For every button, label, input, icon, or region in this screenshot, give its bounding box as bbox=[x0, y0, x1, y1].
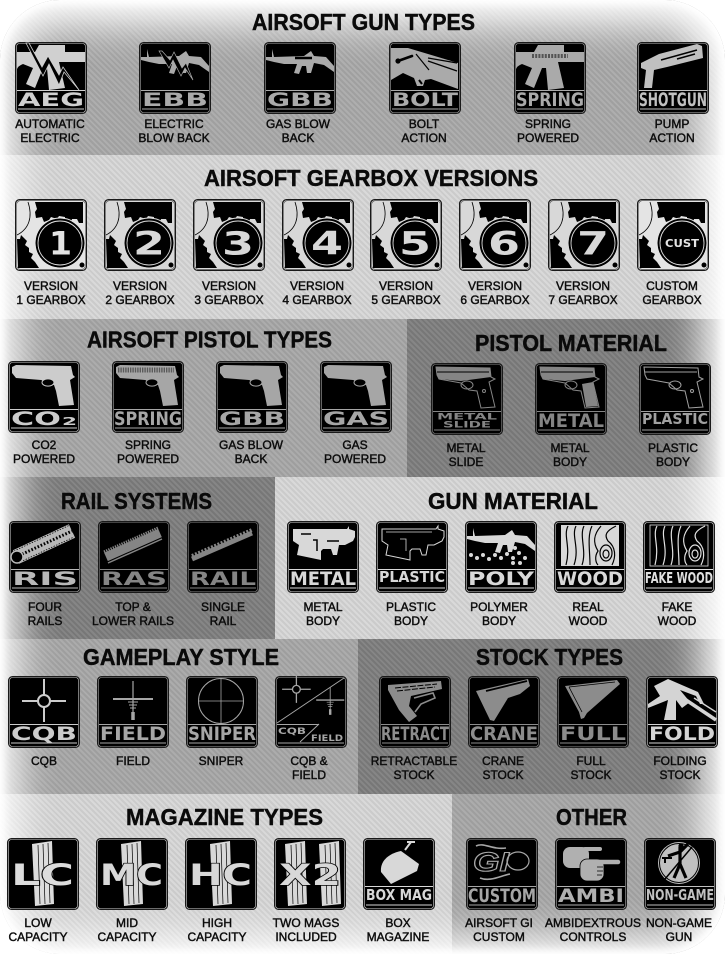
label: VERSION bbox=[468, 279, 522, 293]
label: LOW bbox=[24, 916, 52, 930]
icon: version 5: 5 bbox=[399, 224, 431, 262]
label: FIELD bbox=[292, 768, 326, 782]
icon: single rail bbox=[188, 522, 258, 592]
icon: metal body receiver: METAL bbox=[290, 568, 356, 590]
label: PUMP bbox=[655, 117, 689, 131]
label: CQB bbox=[31, 754, 57, 768]
icon: AEG bbox=[16, 42, 86, 114]
icon: spring: SPRING bbox=[516, 89, 584, 111]
panel: pistol material bbox=[407, 319, 725, 477]
label: GAS BLOW bbox=[266, 117, 331, 131]
panel: airsoft pistol types bbox=[0, 319, 407, 477]
icon: GBB pistol bbox=[216, 362, 288, 432]
label: ELECTRIC bbox=[20, 131, 80, 145]
icon: airsoft GI custom: GI bbox=[473, 847, 510, 877]
label: AUTOMATIC bbox=[15, 117, 85, 131]
label: SNIPER bbox=[199, 754, 244, 768]
label: TWO MAGS bbox=[273, 916, 339, 930]
icon: version 2 bbox=[104, 200, 176, 270]
panel: rail systems bbox=[0, 477, 275, 639]
label: VERSION bbox=[202, 279, 256, 293]
label: GEARBOX bbox=[642, 293, 702, 307]
label: MAGAZINE bbox=[367, 930, 429, 944]
label: GUN bbox=[666, 930, 692, 944]
icon: CO2 bbox=[8, 362, 80, 432]
icon: non-game gun bbox=[644, 838, 716, 910]
icon: spring pistol bbox=[112, 362, 184, 432]
icon: version 6: 6 bbox=[488, 224, 520, 262]
icon: fake wood bbox=[644, 522, 714, 592]
label: SPRING bbox=[525, 117, 571, 131]
label: CAPACITY bbox=[187, 930, 247, 944]
label: VERSION bbox=[290, 279, 344, 293]
icon: polymer bbox=[466, 522, 536, 592]
heading: OTHER bbox=[556, 804, 627, 830]
label: 3 GEARBOX bbox=[194, 293, 264, 307]
icon: RAS bbox=[98, 522, 170, 592]
label: TOP & bbox=[115, 600, 151, 614]
label: POWERED bbox=[13, 452, 75, 466]
panel: other bbox=[452, 794, 725, 954]
icon: sniper: SNIPER bbox=[188, 723, 256, 745]
icon: CO2: 2 bbox=[62, 415, 77, 428]
icon: version 6 bbox=[460, 200, 530, 270]
label: BODY bbox=[656, 455, 690, 469]
icon: two mags: X2 bbox=[279, 858, 341, 892]
icon: version 3: 3 bbox=[222, 224, 254, 262]
label: FIELD bbox=[116, 754, 150, 768]
heading: STOCK TYPES bbox=[476, 644, 623, 670]
icon: low capacity: LC bbox=[11, 858, 74, 892]
icon: plastic body bbox=[640, 364, 710, 434]
label: CUSTOM bbox=[473, 930, 525, 944]
icon: version 1 bbox=[16, 200, 86, 270]
label: VERSION bbox=[379, 279, 433, 293]
label: RETRACTABLE bbox=[371, 754, 457, 768]
label: RAIL bbox=[210, 614, 237, 628]
icon: high capacity bbox=[186, 838, 256, 910]
label: 6 GEARBOX bbox=[460, 293, 530, 307]
heading: GAMEPLAY STYLE bbox=[83, 644, 279, 670]
label: METAL bbox=[446, 441, 486, 455]
label: SINGLE bbox=[201, 600, 245, 614]
icon: GBB: GBB bbox=[267, 89, 333, 111]
icon: version 5 bbox=[370, 200, 442, 270]
label: WOOD bbox=[569, 614, 608, 628]
icon: plastic body receiver: PLASTIC bbox=[379, 568, 445, 586]
label: 5 GEARBOX bbox=[371, 293, 441, 307]
icon: single rail: RAIL bbox=[190, 568, 256, 590]
panel: stock types bbox=[358, 639, 725, 794]
label: BOLT bbox=[409, 117, 440, 131]
label: BODY bbox=[394, 614, 428, 628]
icon: real wood bbox=[554, 522, 626, 592]
icon: spring pistol: SPRING bbox=[114, 408, 182, 430]
icon: airsoft GI custom bbox=[466, 838, 538, 910]
label: BOX bbox=[385, 916, 411, 930]
icon: RIS: RIS bbox=[12, 568, 78, 590]
icon: crane stock bbox=[468, 676, 540, 748]
label: 1 GEARBOX bbox=[16, 293, 86, 307]
icon: full stock: FULL bbox=[560, 723, 626, 745]
icon: folding stock: FOLD bbox=[649, 723, 715, 745]
icon: polymer: POLY bbox=[468, 568, 534, 590]
icon: field bbox=[98, 676, 168, 748]
panel: gun material bbox=[275, 477, 725, 639]
label: CQB & bbox=[290, 754, 328, 768]
icon: crane stock: CRANE bbox=[470, 723, 538, 745]
label: GAS bbox=[342, 438, 368, 452]
label: 7 GEARBOX bbox=[548, 293, 618, 307]
label: METAL bbox=[550, 441, 590, 455]
heading: AIRSOFT GUN TYPES bbox=[252, 9, 475, 35]
heading: PISTOL MATERIAL bbox=[475, 330, 667, 356]
label: NON-GAME bbox=[646, 916, 712, 930]
icon: plastic body receiver bbox=[376, 522, 448, 592]
icon: version 2: 2 bbox=[133, 224, 165, 262]
icon: metal body bbox=[536, 364, 606, 434]
label: VERSION bbox=[24, 279, 78, 293]
icon: full stock bbox=[558, 676, 628, 748]
icon: RAS: RAS bbox=[101, 568, 167, 590]
label: CONTROLS bbox=[560, 930, 626, 944]
icon: version 4 bbox=[282, 200, 354, 270]
label: BODY bbox=[306, 614, 340, 628]
label: CAPACITY bbox=[97, 930, 157, 944]
icon: low capacity bbox=[8, 838, 78, 910]
label: 4 GEARBOX bbox=[282, 293, 352, 307]
label: HIGH bbox=[202, 916, 232, 930]
icon: mid capacity: MC bbox=[100, 858, 163, 892]
icon: box magazine: BOX MAG bbox=[366, 886, 432, 904]
heading: RAIL SYSTEMS bbox=[61, 488, 212, 514]
label: POLYMER bbox=[470, 600, 528, 614]
icon: two mags bbox=[274, 838, 346, 910]
icon: ambidextrous hands: AMBI bbox=[558, 885, 624, 907]
icon: version 1: 1 bbox=[49, 224, 72, 262]
label: LOWER RAILS bbox=[92, 614, 174, 628]
label: POWERED bbox=[324, 452, 386, 466]
icon: shotgun bbox=[638, 42, 708, 114]
label: AMBIDEXTROUS bbox=[545, 916, 641, 930]
label: WOOD bbox=[658, 614, 697, 628]
icon: plastic body: PLASTIC bbox=[642, 410, 708, 428]
icon: retractable stock: RETRACT bbox=[381, 723, 449, 745]
label: SLIDE bbox=[449, 455, 483, 469]
icon: folding stock bbox=[646, 676, 718, 748]
label: VERSION bbox=[113, 279, 167, 293]
label: METAL bbox=[303, 600, 343, 614]
icon: CQB and field: CQB bbox=[278, 727, 306, 737]
label: CUSTOM bbox=[646, 279, 698, 293]
label: GAS BLOW bbox=[219, 438, 284, 452]
label: ACTION bbox=[401, 131, 447, 145]
panel: airsoft gun types bbox=[0, 0, 725, 155]
icon: mid capacity bbox=[96, 838, 168, 910]
label: PLASTIC bbox=[386, 600, 436, 614]
icon: version 4: 4 bbox=[311, 224, 343, 262]
icon: real wood: WOOD bbox=[557, 568, 623, 590]
icon: version 7: 7 bbox=[577, 224, 609, 262]
heading: AIRSOFT GEARBOX VERSIONS bbox=[204, 165, 538, 191]
icon: EBB: EBB bbox=[142, 89, 208, 111]
label: BODY bbox=[482, 614, 516, 628]
label: STOCK bbox=[482, 768, 524, 782]
icon: version 3 bbox=[194, 200, 264, 270]
panel: airsoft gearbox versions bbox=[0, 155, 725, 319]
label: BACK bbox=[282, 131, 314, 145]
label: BODY bbox=[553, 455, 587, 469]
panel: magazine types bbox=[0, 794, 452, 954]
icon: CQB: CQB bbox=[11, 723, 77, 745]
label: INCLUDED bbox=[275, 930, 337, 944]
icon: EBB bbox=[140, 42, 210, 114]
icon: GAS pistol bbox=[320, 362, 392, 432]
label: STOCK bbox=[393, 768, 435, 782]
label: FULL bbox=[576, 754, 606, 768]
label: ACTION bbox=[649, 131, 695, 145]
icon: high capacity: HC bbox=[189, 858, 252, 892]
label: VERSION bbox=[556, 279, 610, 293]
heading: GUN MATERIAL bbox=[428, 488, 598, 514]
label: RAILS bbox=[28, 614, 62, 628]
label: CAPACITY bbox=[8, 930, 68, 944]
label: POWERED bbox=[117, 452, 179, 466]
icon: CQB and field: FIELD bbox=[311, 734, 343, 744]
label: 2 GEARBOX bbox=[105, 293, 175, 307]
icon: CO2: CO bbox=[11, 408, 61, 430]
label: AIRSOFT GI bbox=[465, 916, 533, 930]
icon: bolt action bbox=[390, 42, 460, 114]
heading: AIRSOFT PISTOL TYPES bbox=[87, 326, 332, 352]
icon: RIS bbox=[10, 522, 80, 592]
icon: ambidextrous hands bbox=[556, 838, 626, 910]
label: REAL bbox=[572, 600, 604, 614]
label: FOLDING bbox=[653, 754, 707, 768]
label: FAKE bbox=[662, 600, 692, 614]
icon: metal slide bbox=[432, 364, 502, 434]
label: BLOW BACK bbox=[138, 131, 210, 145]
icon: airsoft GI custom: CUSTOM bbox=[468, 885, 536, 907]
icon: CQB and field bbox=[276, 675, 346, 748]
icon: metal slide: METAL bbox=[437, 412, 497, 422]
label: BACK bbox=[235, 452, 267, 466]
icon: AEG: AEG bbox=[18, 89, 84, 111]
icon: retractable stock bbox=[380, 676, 450, 748]
icon: GBB pistol: GBB bbox=[219, 408, 285, 430]
icon: field: FIELD bbox=[100, 723, 166, 745]
label: CRANE bbox=[482, 754, 524, 768]
icon: GBB bbox=[264, 42, 336, 114]
icon: version 7 bbox=[548, 200, 620, 270]
label: FOUR bbox=[28, 600, 62, 614]
label: CO2 bbox=[32, 438, 57, 452]
icon: custom gearbox bbox=[638, 200, 708, 270]
icon: metal slide: SLIDE bbox=[443, 420, 491, 430]
label: STOCK bbox=[570, 768, 612, 782]
icon: bolt action: BOLT bbox=[392, 89, 458, 111]
icon: box magazine bbox=[364, 838, 434, 910]
icon: CQB bbox=[8, 676, 80, 748]
icon: custom gearbox: CUST bbox=[665, 237, 700, 250]
label: STOCK bbox=[659, 768, 701, 782]
label: ELECTRIC bbox=[144, 117, 204, 131]
icon: metal body receiver bbox=[288, 522, 358, 592]
label: PLASTIC bbox=[648, 441, 698, 455]
label: SPRING bbox=[125, 438, 171, 452]
label: POWERED bbox=[517, 131, 579, 145]
icon: GAS pistol: GAS bbox=[323, 408, 389, 430]
label: MID bbox=[116, 916, 138, 930]
icon: sniper bbox=[186, 676, 258, 748]
heading: MAGAZINE TYPES bbox=[126, 804, 323, 830]
panel: gameplay style bbox=[0, 639, 358, 794]
icon: metal body: METAL bbox=[538, 410, 604, 432]
icon: spring bbox=[514, 42, 586, 114]
